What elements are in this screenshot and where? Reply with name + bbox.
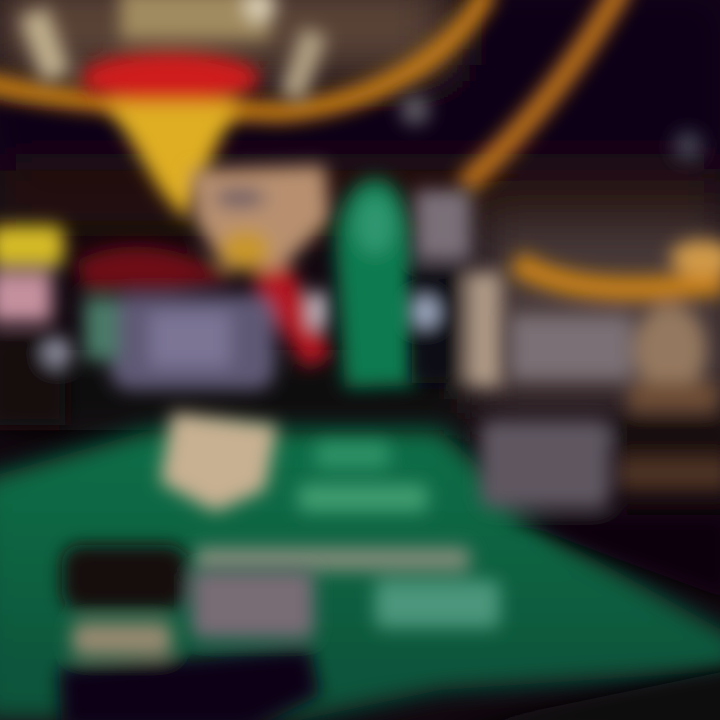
left slot machine (0, 225, 72, 425)
chandelier (19, 0, 703, 220)
ceiling and back wall (0, 0, 720, 430)
ceiling arcs (0, 0, 620, 180)
dark foreground chips (58, 545, 720, 720)
table felt (0, 430, 720, 720)
cards and betting marks on table (160, 412, 500, 628)
dealer figure (75, 165, 332, 390)
right bar lights (480, 240, 720, 600)
grey column (410, 190, 502, 387)
green tower (335, 178, 416, 388)
